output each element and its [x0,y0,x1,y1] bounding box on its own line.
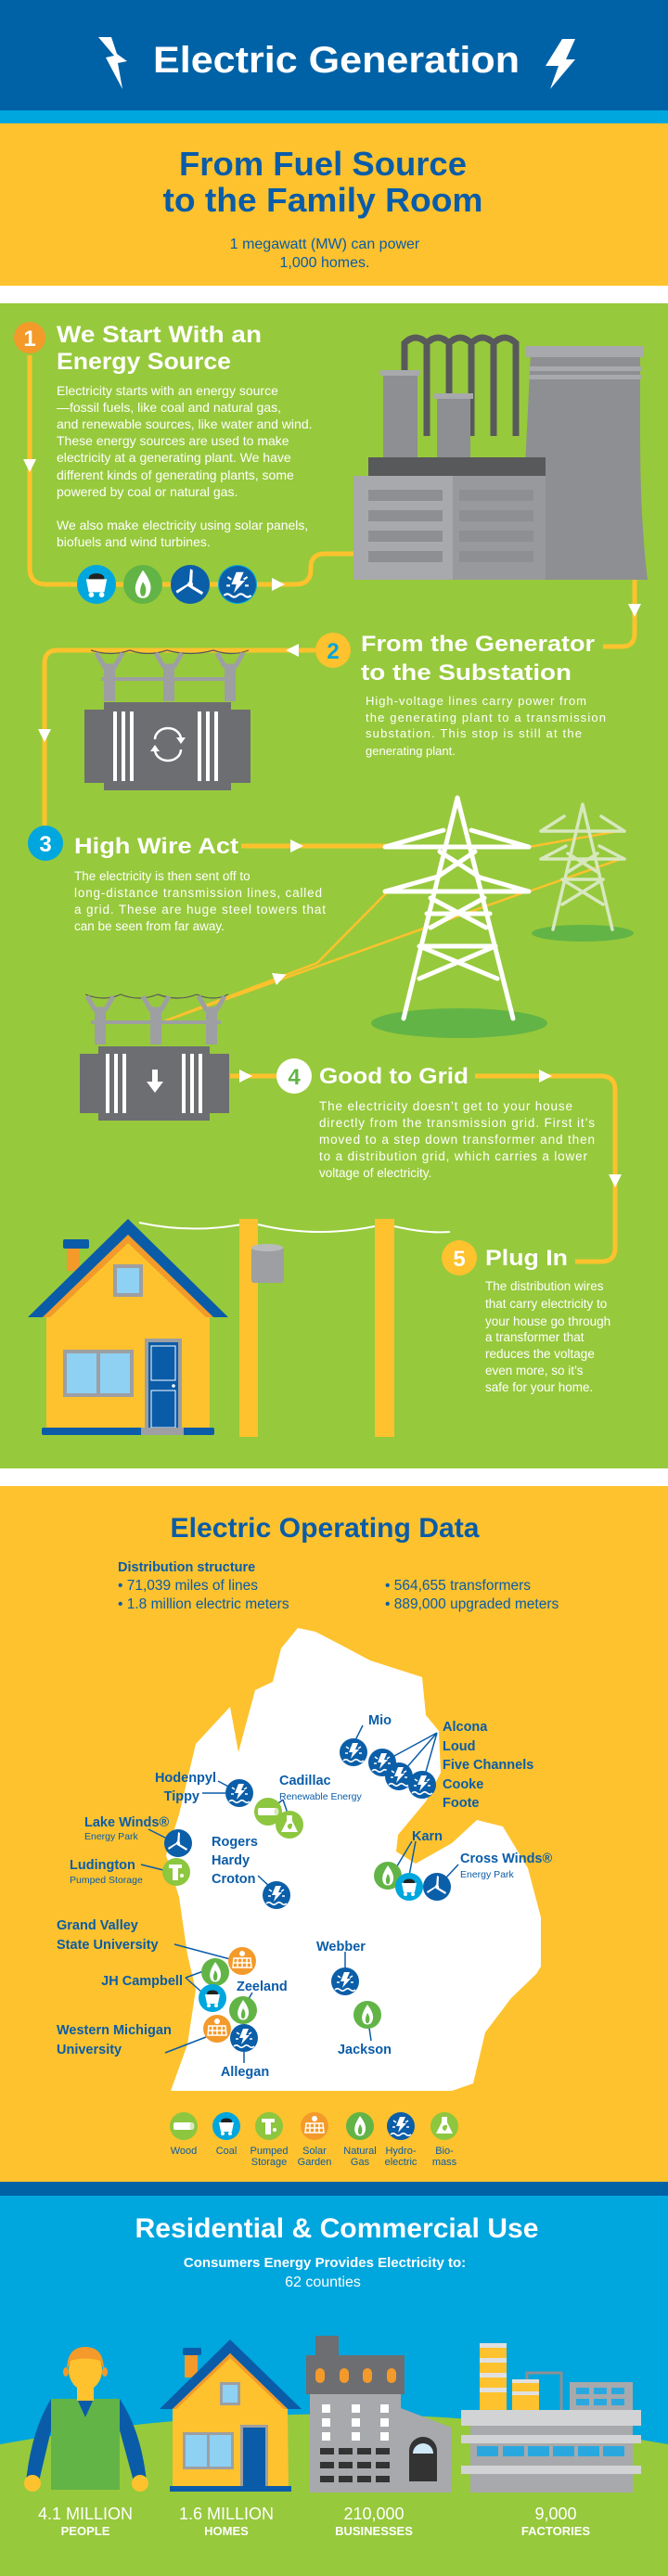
map labels: Jackson [338,2043,392,2057]
usage stats: HOMES [204,2524,249,2538]
step 4 text: moved to a step down transformer and then [319,1133,595,1147]
step 1 heading [57,322,262,375]
panel: generation process [0,303,668,1468]
residential heading: Residential & Commercial Use [135,2213,538,2244]
icon: left lightning bolt [98,37,127,89]
map labels: Hodenpyl [155,1771,216,1786]
step 5 text: reduces the voltage [485,1347,595,1361]
step 1 text: powered by coal or natural gas. [57,484,238,499]
map labels: Alcona [443,1720,488,1735]
step 1 text: Electricity starts with an energy source [57,383,278,398]
map of Michigan: Energy Park [460,1869,515,1880]
legend: Solar [302,2146,327,2157]
step 4 number circle [276,1058,312,1094]
energy source icons [77,565,257,604]
step 3 number circle: 3 [39,832,52,857]
step 3 number circle [28,826,63,861]
map labels: Cross Winds® [460,1852,552,1866]
map labels: Karn [412,1829,443,1844]
step 5 text [485,1279,610,1394]
map labels: Loud [443,1739,475,1754]
step 4 [276,1058,595,1180]
arrows [23,459,641,1187]
step 2 heading: From the Generator [361,632,595,657]
step 1 heading: Energy Source [57,349,231,375]
step 5 text: The distribution wires [485,1279,604,1293]
step 2 heading: to the Substation [361,660,572,686]
step 5 text: your house go through [485,1314,610,1328]
usage stats: 4.1 MILLION [38,2505,133,2523]
illustration: power plant [353,338,648,580]
flow path lines [30,355,635,1262]
step 3 text: can be seen from far away. [74,919,225,933]
legend: Storage [251,2157,287,2168]
step 1 text: —fossil fuels, like coal and natural gas, [57,400,281,415]
legend: electric [385,2157,418,2168]
illustration: person [24,2347,148,2492]
step 1 text: and renewable sources, like water and wind. [57,417,312,431]
step 2 [315,632,606,758]
map icons [162,1738,451,2052]
map labels: JH Campbell [101,1974,183,1989]
step 2 number circle [315,633,351,668]
provider note: Consumers Energy Provides Electricity to: [184,2255,466,2271]
usage stats [38,2505,590,2538]
step 5 number circle: 5 [453,1247,466,1272]
map labels [57,1713,552,2080]
distribution structure stats: Distribution structure [118,1560,255,1575]
step 5 [442,1240,610,1394]
step 3 [28,826,326,933]
usage stats: 1.6 MILLION [179,2505,274,2523]
distribution structure stats: • 564,655 transformers [385,1578,531,1594]
usage stats: 210,000 [343,2505,405,2523]
map labels: Rogers [212,1835,258,1850]
map labels: University [57,2043,122,2057]
map labels: State University [57,1938,159,1953]
illustration: house with poles [28,1219,450,1437]
step 1 text: electricity at a generating plant. We have [57,450,291,465]
step 1 text: different kinds of generating plants, some [57,468,294,482]
megawatt note: 1 megawatt (MW) can power [230,237,420,252]
step 4 text: The electricity doesn’t get to your house [319,1099,572,1113]
distribution structure stats: • 889,000 upgraded meters [385,1596,559,1612]
map labels: Five Channels [443,1758,533,1773]
step 3 text: a grid. These are huge steel towers that [74,903,326,916]
legend: Bio- [435,2146,454,2157]
step 3 heading: High Wire Act [74,834,238,859]
header band [0,0,668,123]
step 5 text: a transformer that [485,1330,584,1344]
step 5 text: even more, so it’s [485,1364,584,1378]
map labels: Mio [368,1713,392,1728]
step 2 number circle: 2 [327,639,340,664]
step 3 text: long-distance transmission lines, called [74,886,322,900]
step 1 text: biofuels and wind turbines. [57,534,211,549]
step 5 heading: Plug In [485,1246,568,1271]
wires from tower [161,830,623,1022]
step 1 text: These energy sources are used to make [57,433,289,448]
map labels: Webber [316,1940,366,1954]
usage stats: PEOPLE [61,2524,110,2538]
step 2 text: substation. This stop is still at the [366,726,582,740]
intro panel: to the Family Room [163,181,482,219]
map labels: Foote [443,1796,479,1811]
provider note [184,2255,466,2290]
icon: right lightning bolt [546,39,575,89]
step 5 text: that carry electricity to [485,1297,607,1311]
step 4 text: directly from the transmission grid. First it’s [319,1116,595,1130]
step 4 text: voltage of electricity. [319,1166,431,1180]
step 2 heading [361,632,595,686]
step 4 heading: Good to Grid [319,1064,469,1089]
step 1 text [57,383,312,549]
map labels: Tippy [164,1789,199,1804]
step 2 text: High-voltage lines carry power from [366,694,586,708]
step 1 number circle [14,322,45,353]
legend: mass [432,2157,457,2168]
map of Michigan: Energy Park [84,1831,139,1842]
step 2 text: the generating plant to a transmission [366,711,606,724]
map labels: Ludington [70,1858,135,1873]
distribution structure stats [118,1560,559,1612]
map labels: Cooke [443,1777,483,1792]
map labels: Grand Valley [57,1918,138,1933]
illustration: small transmission tower [532,804,634,942]
map of Michigan: Renewable Energy [279,1791,362,1802]
map labels: Zeeland [237,1980,288,1994]
map of Michigan: Pumped Storage [70,1875,143,1886]
map labels: Lake Winds® [84,1815,169,1830]
map labels: Cadillac [279,1774,331,1788]
provider note: 62 counties [285,2275,361,2290]
legend: Garden [298,2157,331,2168]
usage stats: 9,000 [534,2505,577,2523]
map of Michigan [57,1628,552,2091]
step 5 number circle [442,1240,477,1275]
step 1 [14,322,312,604]
step 4 text [319,1099,595,1180]
step 3 text: The electricity is then sent off to [74,869,250,883]
panel: electric operating data [0,1486,668,2182]
step 2 text [366,694,606,758]
data heading: Electric Operating Data [171,1513,480,1544]
map labels: Hardy [212,1853,250,1868]
map labels: Allegan [221,2065,269,2080]
legend: Pumped [250,2146,288,2157]
step 1 heading: We Start With an [57,322,262,348]
step 3 text [74,869,326,933]
step 4 text: to a distribution grid, which carries a lower [319,1149,588,1163]
subtitle heading: From Fuel Source [179,145,467,183]
legend: Gas [351,2157,370,2168]
step 1 number circle: 1 [23,327,36,352]
map labels: Croton [212,1872,256,1887]
legend: Natural [343,2146,377,2157]
legend [170,2112,458,2168]
distribution structure stats: • 1.8 million electric meters [118,1596,289,1612]
illustration: step-down transformer [80,994,229,1121]
legend: Coal [216,2146,237,2157]
step 1 text: We also make electricity using solar panels, [57,518,308,532]
legend: Wood [171,2146,197,2157]
distribution structure stats: • 71,039 miles of lines [118,1578,258,1594]
title: Electric Generation [153,40,520,81]
illustration: business [306,2336,452,2493]
illustration: factory [461,2343,641,2493]
step 2 text: generating plant. [366,744,456,758]
legend: Hydro- [385,2146,417,2157]
usage stats: FACTORIES [521,2524,590,2538]
step 5 text: safe for your home. [485,1380,593,1394]
map labels: Western Michigan [57,2023,172,2038]
illustration: substation transformer [84,650,250,790]
usage stats: BUSINESSES [335,2524,413,2538]
illustration: home [160,2339,302,2492]
intro panel: 1,000 homes. [280,255,369,271]
panel: residential & commercial use [0,2182,668,2576]
intro panel [0,123,668,286]
illustration: large transmission tower [371,798,547,1038]
step 4 number circle: 4 [288,1065,301,1090]
